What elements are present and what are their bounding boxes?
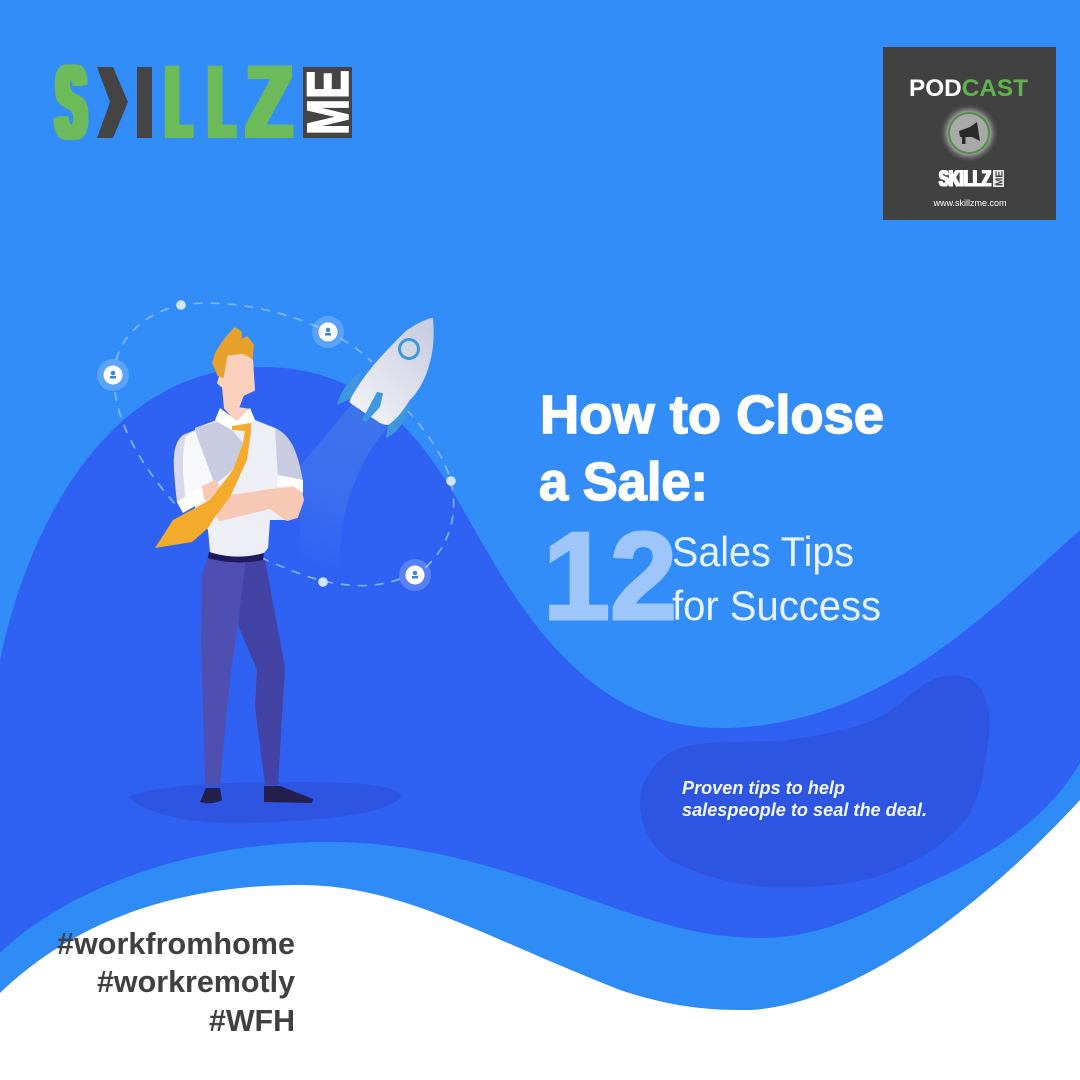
podcast badge: PODCAST xyxy=(909,75,1028,102)
node: top-left user xyxy=(97,359,129,391)
tagline xyxy=(682,778,927,820)
node: bottom user xyxy=(399,559,431,591)
sleeve xyxy=(174,430,217,513)
title: a Sale: xyxy=(539,452,708,512)
hashtags: #WFH xyxy=(209,1003,295,1038)
belt xyxy=(208,552,264,562)
logo: SKILLZ ME xyxy=(56,44,361,160)
light blue band xyxy=(0,763,1080,1080)
icon: megaphone xyxy=(939,103,999,163)
rocket exhaust xyxy=(300,402,388,575)
tagline: salespeople to seal the deal. xyxy=(682,800,927,820)
podcast badge xyxy=(883,47,1056,220)
node: centre user xyxy=(312,316,344,348)
title xyxy=(539,385,884,646)
orbit: dashed path xyxy=(115,303,454,586)
title: Sales Tips xyxy=(672,528,854,575)
mini logo: SKILLZ xyxy=(939,166,991,191)
logo: SKILLZ ME: S xyxy=(56,44,86,160)
blob behind tagline xyxy=(640,675,990,887)
man xyxy=(155,328,313,803)
rocket xyxy=(337,318,434,438)
forearms xyxy=(203,481,303,520)
orbit dots xyxy=(176,300,456,587)
logo: SKILLZ ME: L xyxy=(210,46,233,159)
dark blue wave xyxy=(0,367,1080,953)
hashtags: #workfromhome xyxy=(57,926,295,961)
hair xyxy=(213,328,253,377)
neck and face xyxy=(218,353,254,422)
tagline: Proven tips to help xyxy=(682,778,845,798)
collar xyxy=(215,408,255,430)
logo: SKILLZ ME: ME xyxy=(296,70,361,135)
logo: SKILLZ ME: L xyxy=(167,46,190,159)
shadow under man xyxy=(128,782,401,823)
title: How to Close xyxy=(540,385,884,445)
torso xyxy=(195,420,303,557)
tie xyxy=(155,423,251,548)
hashtags: #workremotly xyxy=(97,964,296,999)
hashtags xyxy=(57,926,296,1038)
trousers xyxy=(201,553,285,785)
podcast badge: www.skillzme.com xyxy=(932,198,1007,208)
title: 12 xyxy=(543,508,677,646)
title: for Success xyxy=(672,582,881,629)
shoes xyxy=(200,786,313,803)
logo: SKILLZ ME: Z xyxy=(247,44,291,159)
mini logo: ME xyxy=(994,171,1006,186)
white bottom area xyxy=(0,800,1080,1080)
